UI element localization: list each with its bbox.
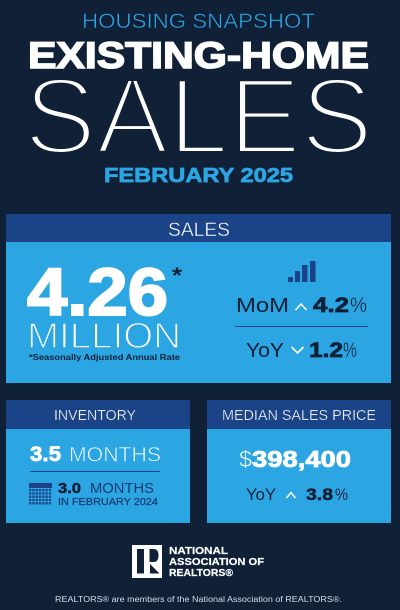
panel: inventory: [6, 400, 190, 523]
stat: price year over year: 3.8: [306, 486, 333, 504]
logo: organisation name: ASSOCIATION OF: [169, 556, 265, 568]
price value: $: [239, 446, 252, 472]
icon: rising bars: [288, 261, 316, 282]
asterisk: *: [172, 263, 183, 288]
headline number: 4.26: [27, 255, 168, 330]
footnote: *Seasonally Adjusted Annual Rate: [29, 353, 181, 362]
stat: month over month: MoM: [236, 294, 289, 317]
stat: price year over year: %: [335, 486, 348, 504]
title line: sales: SALES: [24, 56, 373, 178]
logo: organisation name: [169, 545, 265, 579]
prior-year months of supply: 3.0: [58, 480, 81, 497]
stat: price year over year: [246, 486, 348, 504]
stat: month over month: 4.2: [313, 294, 349, 317]
prior-year months of supply: [58, 480, 158, 508]
panel heading: median sales price: MEDIAN SALES PRICE: [222, 408, 376, 424]
logo: organisation name: NATIONAL: [169, 545, 229, 557]
stat: month over month: [236, 294, 367, 317]
panel heading: inventory: INVENTORY: [54, 408, 136, 424]
price value: 398,400: [252, 446, 351, 472]
logo: organisation name: REALTORS®: [169, 567, 233, 579]
prior-year months of supply: IN FEBRUARY 2024: [58, 496, 158, 508]
panel: sales: [6, 214, 391, 383]
stat: month over month: %: [350, 294, 367, 317]
current months of supply: 3.5: [30, 443, 61, 466]
stat: year over year: 1.2: [309, 339, 343, 362]
date heading: FEBRUARY 2025: [104, 165, 293, 187]
panel heading: sales: SALES: [168, 220, 230, 241]
current months of supply: [30, 443, 161, 466]
unit: million: MILLION: [27, 315, 181, 356]
stat: price year over year: YoY: [246, 486, 276, 504]
panel: median sales price: [207, 400, 391, 523]
footer note: REALTORS® are members of the National Association of REALTORS®.: [55, 595, 342, 604]
current months of supply: MONTHS: [69, 444, 161, 466]
eyebrow heading: HOUSING SNAPSHOT: [82, 10, 315, 33]
prior-year months of supply: MONTHS: [90, 480, 154, 497]
title line: existing-home: EXISTING-HOME: [28, 35, 369, 76]
icon: calendar: [29, 483, 52, 505]
stat: year over year: %: [343, 339, 357, 362]
logo: R mark: [132, 545, 162, 578]
stat: year over year: [246, 339, 357, 362]
stat: year over year: YoY: [246, 339, 284, 362]
